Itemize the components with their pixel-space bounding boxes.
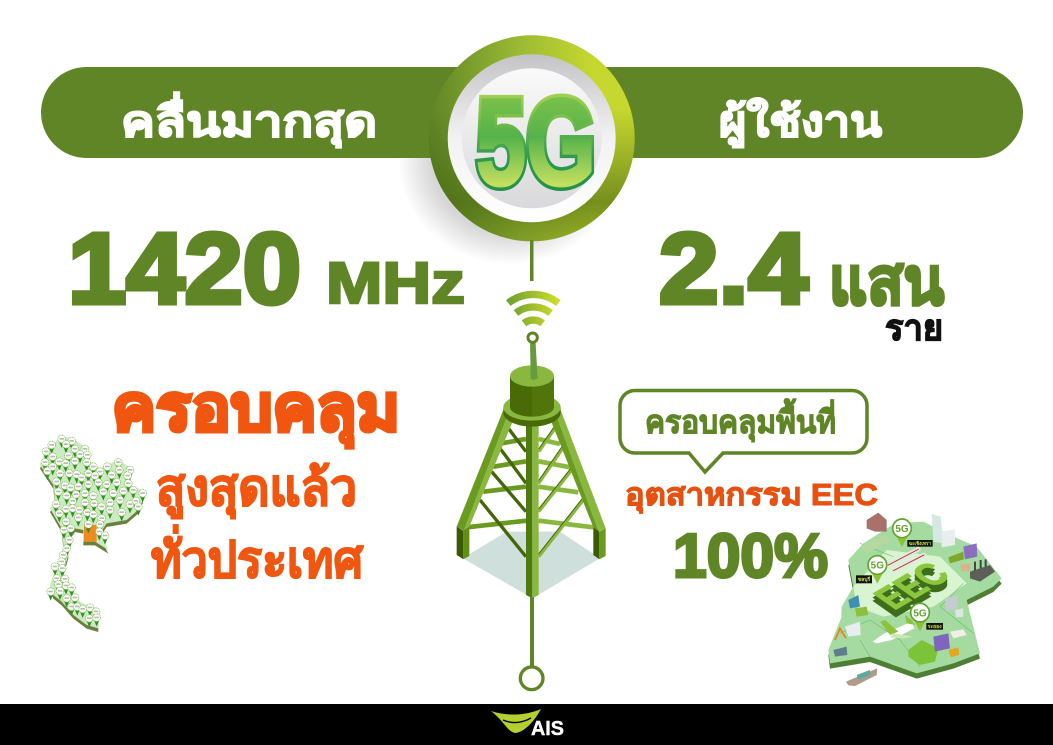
connector line top (530, 240, 534, 281)
AIS logo: AIS (531, 718, 564, 740)
left leg (457, 410, 508, 531)
land base (828, 527, 1002, 679)
users value: แสน (829, 244, 944, 318)
shadow under header circle (398, 55, 622, 265)
coverage text: สูงสุดแล้ว (156, 460, 357, 519)
wifi arcs (508, 294, 558, 323)
tower (457, 294, 606, 690)
EEC map (828, 513, 1002, 686)
users value: 2.4 (659, 213, 808, 325)
platform (503, 407, 561, 427)
train (888, 549, 924, 571)
callout: ครอบคลุมพื้นที่ (645, 398, 836, 443)
center leg (526, 423, 532, 598)
header bar (41, 67, 1023, 158)
spectrum value: 1420 (68, 213, 301, 325)
ground shadow (463, 532, 600, 598)
heading: most spectrum: คลื่นมากสุด (121, 92, 377, 148)
5G text: 5G (476, 75, 596, 212)
ship (846, 668, 877, 686)
pin: Rayong: ระยอง (928, 624, 942, 630)
cylinder (510, 377, 532, 417)
EEC block letters: EEC (865, 560, 960, 620)
lower line (530, 597, 534, 666)
pin: Rayong: 5G (913, 608, 927, 619)
roads (840, 543, 973, 667)
pin: Chachoengsao (893, 519, 933, 547)
EEC block letters: EEC (865, 556, 960, 616)
buildings (867, 513, 887, 532)
AIS logo (491, 709, 564, 740)
coverage text (112, 372, 400, 588)
warehouse (908, 640, 938, 665)
5G badge (386, 0, 677, 284)
heading: users: ผู้ใช้งาน (719, 97, 882, 148)
lower circle (520, 667, 543, 690)
5G text: 5G (476, 75, 596, 212)
spectrum value (68, 213, 465, 325)
100 percent: 100% (673, 522, 828, 591)
callout (620, 390, 867, 472)
antenna (530, 338, 538, 380)
pin: Chonburi: 5G (871, 561, 884, 572)
pin: Chachoengsao: ฉะเชิงเทรา (909, 540, 931, 547)
pin: Chonburi (856, 556, 887, 584)
cross braces (467, 426, 593, 557)
users value: ราย (885, 307, 943, 348)
right leg (556, 410, 606, 532)
coverage text: ครอบคลุม (112, 372, 400, 448)
footer bar (0, 704, 1053, 745)
users value (659, 213, 944, 348)
pin: Chachoengsao: 5G (895, 524, 909, 535)
spectrum value: MHz (326, 251, 465, 316)
pin: Rayong (911, 603, 943, 631)
port cranes (848, 595, 860, 608)
EEC block letters: EEC (865, 564, 960, 623)
coverage text: ทั่วประเทศ (151, 525, 364, 588)
EEC label: อุตสาหกรรม EEC (625, 477, 878, 514)
Thailand map (40, 435, 146, 632)
pin: Chonburi: ชลบุรี (858, 576, 871, 583)
factory and trucks (963, 543, 977, 559)
airplane (873, 615, 915, 643)
